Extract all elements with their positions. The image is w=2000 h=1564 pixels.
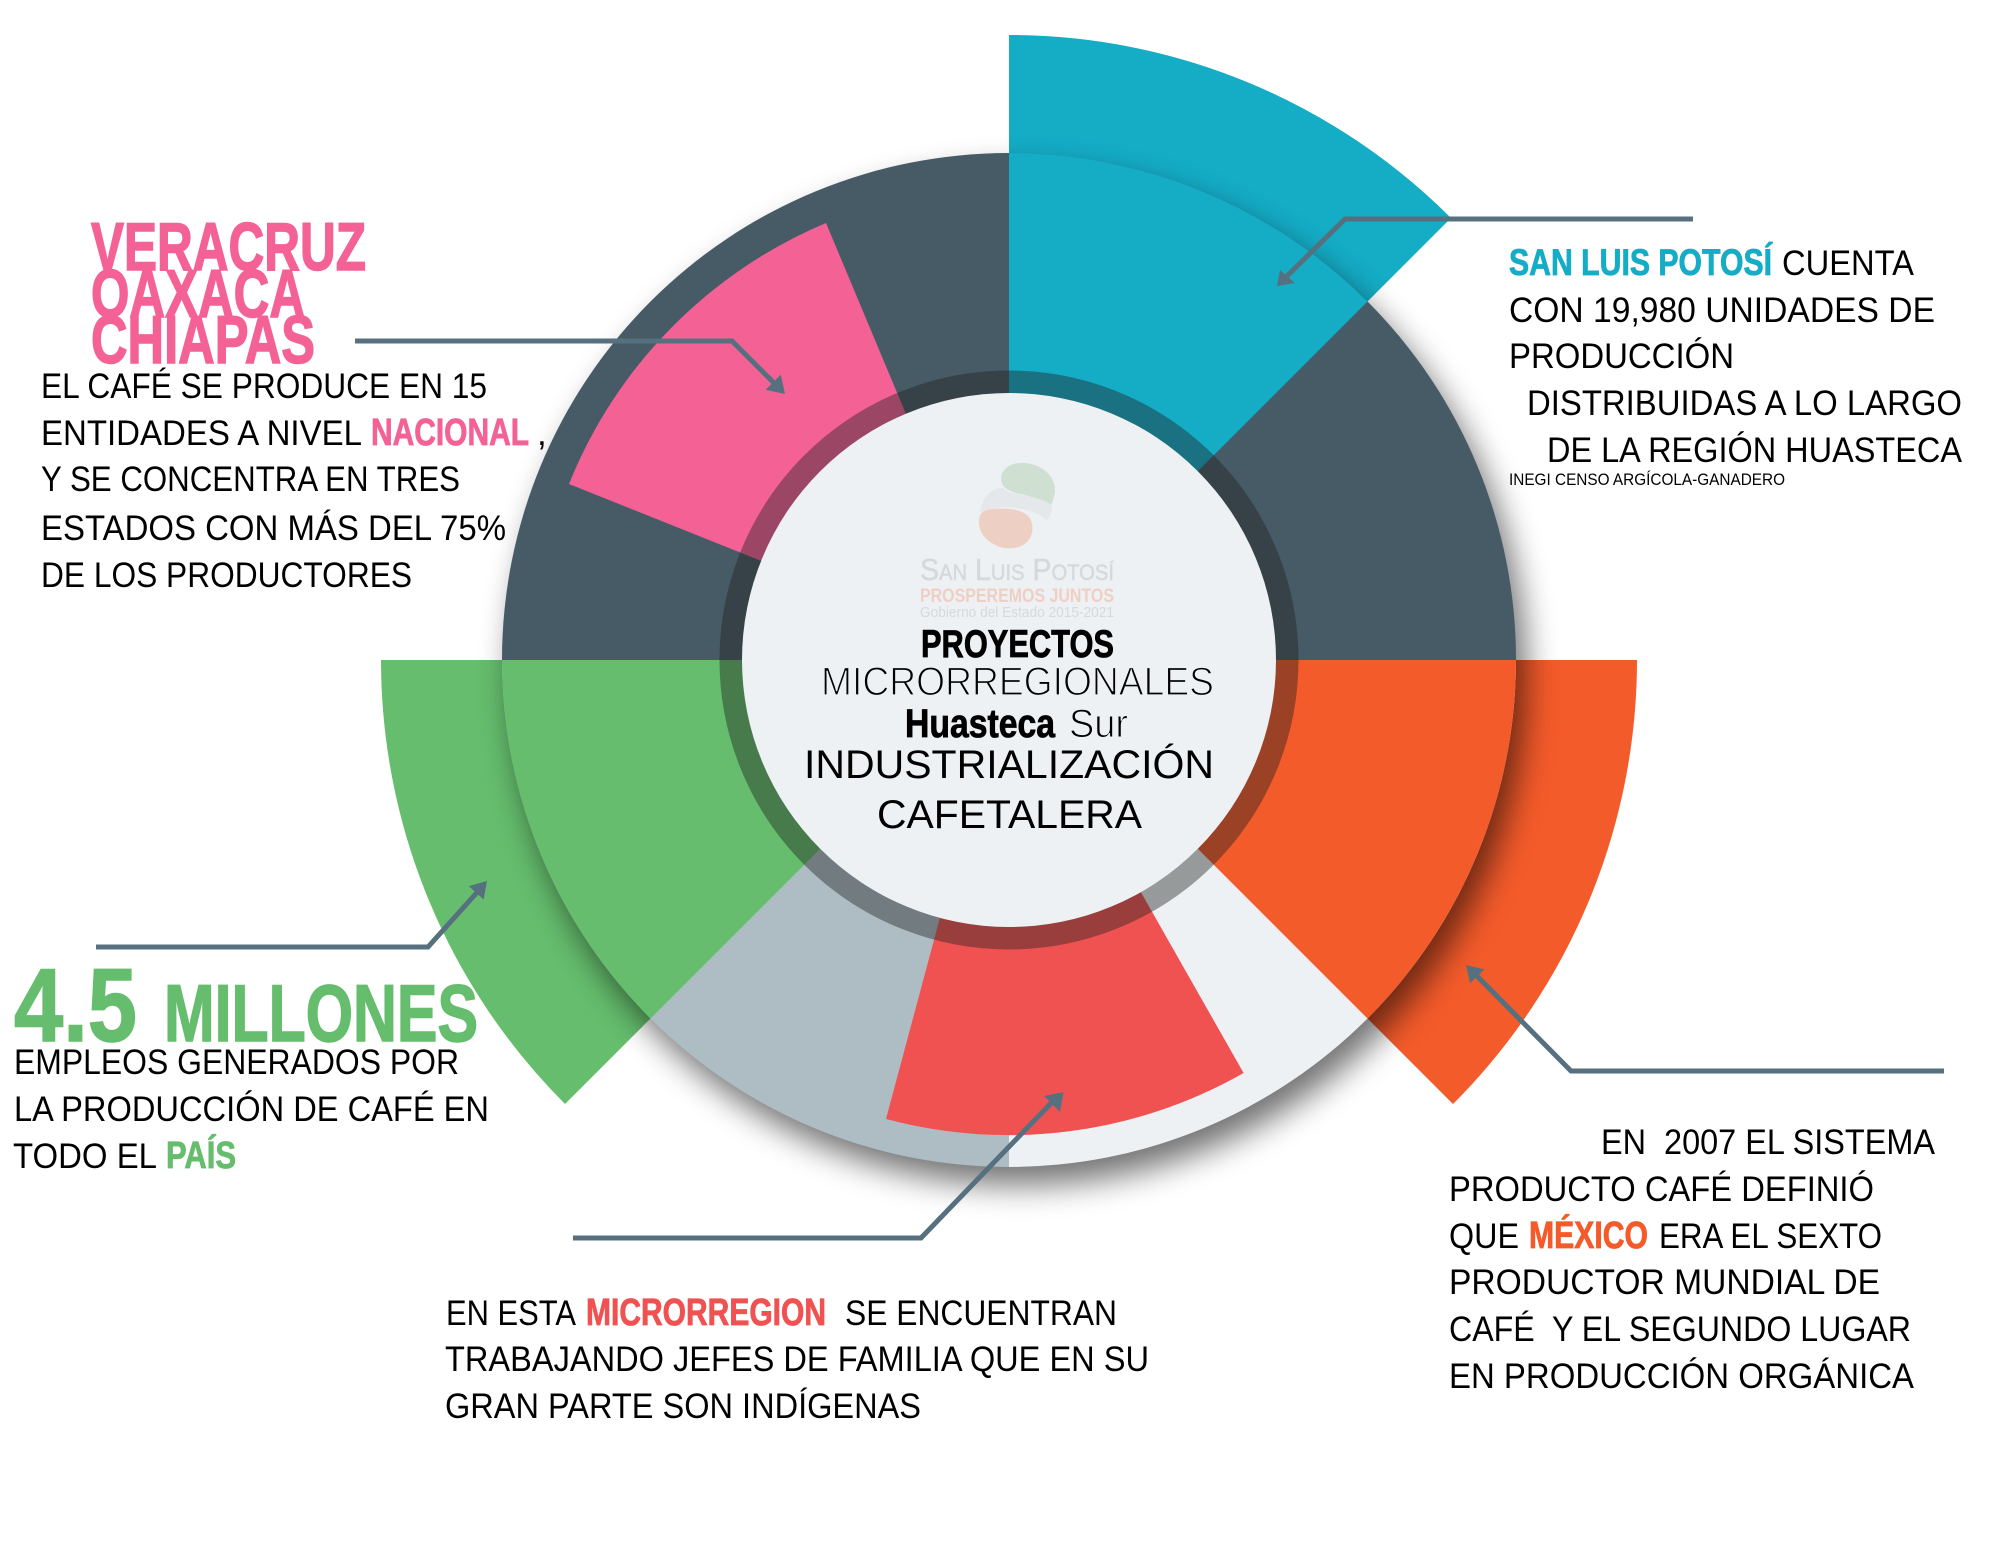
body text: LA PRODUCCIÓN DE CAFÉ EN — [14, 1090, 489, 1129]
text block: mexico — [1449, 1123, 1936, 1396]
body text: NACIONAL — [371, 412, 529, 454]
quadrant: top left dark — [502, 153, 1009, 660]
text block: 4.5 millones — [13, 948, 489, 1177]
inner sector: orange — [1009, 660, 1516, 1018]
outer sector: green — [381, 660, 1009, 1104]
center title — [804, 623, 1214, 837]
quadrant: bottom right pale — [1009, 660, 1516, 1167]
arrow: orange callout — [1466, 965, 1944, 1071]
sector: pink — [569, 223, 1009, 660]
center disc — [742, 393, 1276, 927]
text block: san luis potosi: PRODUCCIÓN — [1509, 337, 1734, 376]
text block: san luis potosi: CON 19,980 UNIDADES DE — [1509, 291, 1935, 330]
text block: san luis potosi: DE LA REGIÓN HUASTECA — [1547, 431, 1963, 470]
quadrant: top right dark — [1009, 153, 1516, 660]
body text: EL CAFÉ SE PRODUCE EN 15 — [41, 367, 487, 406]
quadrant: bottom left blue-grey — [502, 660, 1009, 1167]
title: huasteca: Huasteca — [905, 702, 1056, 746]
inner sector: teal — [1009, 153, 1368, 660]
text block: san luis potosi: DISTRIBUIDAS A LO LARGO — [1527, 384, 1962, 423]
text block: microrregion: GRAN PARTE SON INDÍGENAS — [445, 1387, 921, 1426]
radial chart — [381, 35, 1637, 1185]
heading: veracruz oaxaca chiapas — [91, 209, 366, 378]
body text: EMPLEOS GENERADOS POR — [14, 1043, 459, 1082]
arrow: green callout — [96, 881, 487, 947]
title: sur: Sur — [1069, 702, 1128, 746]
text block: microrregion: TRABAJANDO JEFES DE FAMILIA QUE EN SU — [445, 1340, 1149, 1379]
circle shadow — [512, 171, 1526, 1185]
text block: mexico: MÉXICO — [1529, 1213, 1648, 1257]
heading: veracruz oaxaca chiapas: CHIAPAS — [91, 302, 315, 378]
body text: , — [537, 414, 547, 453]
text block: mexico: CAFÉ Y EL SEGUNDO LUGAR — [1449, 1310, 1911, 1349]
body text — [41, 367, 547, 595]
body text: DE LOS PRODUCTORES — [41, 556, 412, 595]
logo slogan: PROSPEREMOS JUNTOS — [920, 586, 1114, 607]
title: proyectos: PROYECTOS — [921, 623, 1114, 666]
text block: mexico: QUE — [1449, 1217, 1519, 1256]
logo government line: Gobierno del Estado 2015-2021 — [920, 604, 1114, 621]
heading: veracruz oaxaca chiapas: OAXACA — [91, 256, 305, 332]
outer sector: orange — [1009, 660, 1637, 1104]
text block: microrregion: EN ESTA — [446, 1294, 577, 1333]
body text: Y SE CONCENTRA EN TRES — [41, 460, 460, 499]
text block: microrregion: MICRORREGION — [586, 1292, 826, 1334]
text block: mexico: PRODUCTOR MUNDIAL DE — [1449, 1263, 1880, 1302]
title: industrializacion: INDUSTRIALIZACIÓN — [804, 742, 1214, 787]
body text — [13, 1043, 489, 1177]
text block: san luis potosi: SAN LUIS POTOSÍ — [1509, 242, 1773, 283]
translucent ring — [731, 382, 1287, 938]
sector: red — [886, 660, 1244, 1135]
text block: mexico: EN PRODUCCIÓN ORGÁNICA — [1449, 1357, 1915, 1396]
text block: san luis potosi: CUENTA — [1782, 244, 1915, 283]
heading: veracruz oaxaca chiapas: VERACRUZ — [91, 209, 366, 285]
text block: mexico: EN 2007 EL SISTEMA — [1601, 1123, 1936, 1162]
text block: microrregion: SE ENCUENTRAN — [845, 1294, 1117, 1333]
text block: microrregion — [445, 1292, 1149, 1426]
big word: MILLONES — [164, 969, 478, 1059]
arrow: pink callout — [355, 341, 785, 394]
body text: TODO EL — [13, 1137, 157, 1176]
text block: pink states — [41, 209, 547, 595]
inner sector: green — [502, 660, 1009, 1018]
arrow: red callout — [573, 1092, 1064, 1238]
text block: san luis potosi — [1509, 242, 1963, 489]
outer sector: teal — [1009, 35, 1451, 660]
text block: mexico: PRODUCTO CAFÉ DEFINIÓ — [1449, 1170, 1874, 1209]
arrow: teal callout — [1277, 219, 1693, 286]
body text: ESTADOS CON MÁS DEL 75% — [41, 509, 506, 548]
center logo — [920, 463, 1115, 621]
big number: 4.5 — [14, 948, 137, 1064]
title: microrregionales: MICRORREGIONALES — [821, 660, 1214, 704]
source note: INEGI CENSO ARGÍCOLA-GANADERO — [1509, 470, 1785, 489]
title: cafetalera: CAFETALERA — [877, 793, 1142, 837]
text block: mexico: ERA EL SEXTO — [1659, 1217, 1882, 1256]
body text: ENTIDADES A NIVEL — [41, 414, 362, 453]
logo name: San Luis Potosí — [920, 552, 1115, 587]
body text: PAÍS — [166, 1133, 236, 1177]
icon: logo swirl — [979, 463, 1055, 548]
